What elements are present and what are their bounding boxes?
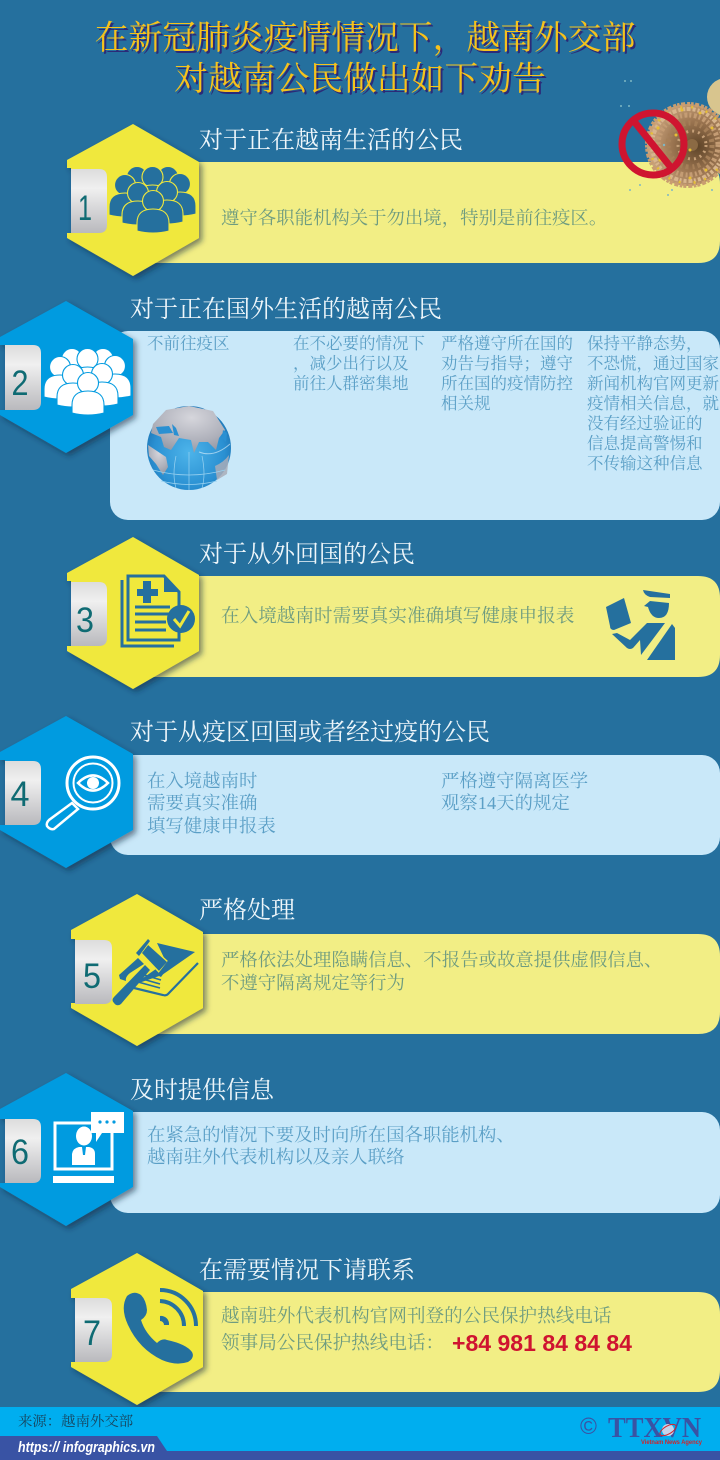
number tab 5 — [75, 940, 112, 1004]
url tag: https:// infographics.vn — [18, 1439, 155, 1456]
bar 5 — [140, 934, 720, 1034]
number tab 2: 2 — [12, 364, 28, 403]
bar 1 — [140, 162, 720, 263]
column 3: 相关规 — [441, 394, 490, 413]
text 6: 在紧急的情况下要及时向所在国各职能机构、 — [147, 1125, 515, 1145]
hexagon 4 — [0, 716, 133, 868]
icon: video call screen with speech bubble — [53, 1112, 124, 1183]
bar 3 — [140, 576, 720, 677]
text 1: 遵守各职能机构关于勿出境，特别是前往疫区。 — [221, 208, 607, 228]
number tab 7: 7 — [83, 1314, 101, 1353]
bar 7 — [140, 1292, 720, 1392]
panel 2: citizens abroad — [0, 296, 720, 520]
column 2: ，减少出行以及 — [293, 354, 409, 373]
column 4: 信息提高警惕和 — [587, 434, 702, 453]
number tab 1: 1 — [78, 189, 92, 228]
panel 1: citizens living in Vietnam — [67, 78, 720, 276]
hexagon 7 — [71, 1253, 203, 1405]
number tab 4: 4 — [10, 775, 30, 814]
logo: TTXVN: TTXVN — [608, 1412, 701, 1444]
footer — [0, 1407, 720, 1460]
number tab 3: 3 — [76, 601, 94, 640]
icon: virus with prohibition sign — [620, 78, 720, 196]
number tab 4 — [5, 761, 41, 825]
hexagon 6 — [0, 1073, 133, 1226]
icon: gavel and law book — [112, 939, 198, 1005]
heading 6: 及时提供信息 — [130, 1077, 275, 1104]
text 6: 越南驻外代表机构以及亲人联络 — [147, 1146, 404, 1167]
number tab 6: 6 — [11, 1133, 29, 1172]
icon: phone with signal — [124, 1290, 196, 1364]
column 3: 所在国的疫情防控 — [441, 374, 573, 393]
text 7: 越南驻外代表机构官网刊登的公民保护热线电话 — [221, 1305, 612, 1327]
text 5: 严格依法处理隐瞒信息、不报告或故意提供虚假信息、 — [221, 949, 662, 970]
text 7: 领事局公民保护热线电话： — [221, 1333, 444, 1354]
panel 7: contact — [71, 1253, 720, 1405]
text 4 right: 观察14天的规定 — [441, 793, 570, 813]
text 5: 不遵守隔离规定等行为 — [221, 973, 405, 993]
panel 4: citizens from epidemic areas — [0, 716, 720, 868]
column 2: 前往人群密集地 — [293, 374, 408, 393]
panel 3: citizens returning — [67, 537, 720, 689]
title — [95, 19, 635, 98]
hexagon 1 — [67, 124, 199, 276]
heading 1: 对于正在越南生活的公民 — [199, 127, 463, 154]
title: 对越南公民做出如下劝告 — [174, 60, 546, 98]
heading 4: 对于从疫区回国或者经过疫的公民 — [130, 719, 490, 746]
number tab 3 — [71, 582, 107, 646]
panel 6: provide information in time — [0, 1073, 720, 1226]
icon: crowd — [44, 348, 131, 415]
panel body 4 — [110, 755, 720, 855]
panel body 6 — [110, 1112, 720, 1213]
icon: officer reading passport — [606, 590, 675, 660]
number tab 1 — [71, 169, 107, 233]
source: 来源：越南外交部 — [18, 1413, 133, 1430]
logo: TTXVN: Vietnam News Agency — [641, 1439, 702, 1446]
hexagon 2 — [0, 301, 133, 453]
logo: TTXVN: © — [580, 1413, 597, 1439]
title: 在新冠肺炎疫情情况下，越南外交部 — [95, 19, 635, 57]
hexagon 5 — [71, 894, 203, 1046]
column 4: 保持平静态势， — [587, 334, 702, 353]
number tab 2 — [5, 345, 41, 410]
number tab 5: 5 — [83, 957, 101, 996]
heading 5: 严格处理 — [199, 897, 295, 924]
column 1: 不前往疫区 — [147, 334, 230, 353]
text 4 left: 在入境越南时 — [147, 770, 257, 791]
logo: TTXVN — [580, 1412, 702, 1446]
icon: crowd — [109, 166, 196, 233]
heading 7: 在需要情况下请联系 — [199, 1257, 415, 1284]
column 3: 严格遵守所在国的 — [441, 334, 573, 353]
footer background — [0, 1407, 720, 1460]
text 4 right: 严格遵守隔离医学 — [441, 771, 588, 791]
column 4: 不传输这种信息 — [587, 454, 703, 473]
column 4: 不恐慌，通过国家 — [587, 354, 719, 373]
icon: magnifier with eye — [47, 757, 119, 829]
column 4: 没有经过验证的 — [587, 414, 702, 433]
hexagon 3 — [67, 537, 199, 689]
number tab 7 — [75, 1298, 112, 1362]
column 2: 在不必要的情况下 — [293, 334, 425, 353]
number tab 6 — [5, 1119, 41, 1183]
column 4: 新闻机构官网更新 — [587, 374, 719, 393]
icon: globe — [147, 406, 231, 490]
column 4: 疫情相关信息，就 — [587, 394, 720, 413]
url tag — [0, 1436, 167, 1456]
text 4 left: 需要真实准确 — [147, 793, 257, 813]
text 4 left: 填写健康申报表 — [147, 815, 276, 836]
text 3: 在入境越南时需要真实准确填写健康申报表 — [221, 605, 574, 627]
heading 3: 对于从外回国的公民 — [199, 541, 415, 568]
icon: health declaration form — [122, 576, 195, 646]
heading 2: 对于正在国外生活的越南公民 — [130, 296, 442, 323]
panel 5: strict handling — [71, 894, 720, 1046]
column 3: 劝告与指导；遵守 — [441, 354, 573, 373]
footer bottom strip — [0, 1451, 720, 1460]
hotline number: +84 981 84 84 84 — [452, 1330, 632, 1356]
panel body 2 — [110, 331, 720, 520]
